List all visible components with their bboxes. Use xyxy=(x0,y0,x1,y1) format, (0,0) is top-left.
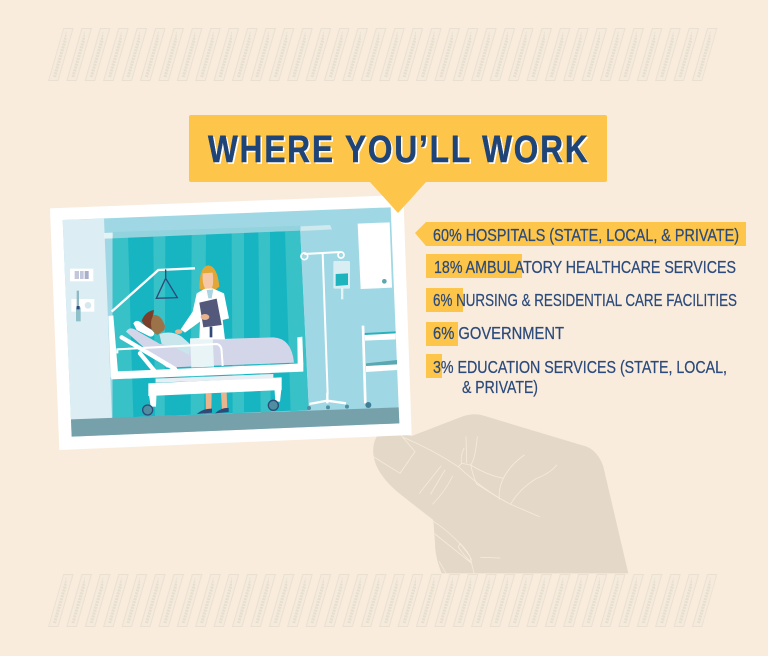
bottom stripe border xyxy=(48,574,718,627)
callout bubble xyxy=(189,115,607,213)
title callout xyxy=(189,115,607,213)
curtain xyxy=(104,225,332,418)
hospital bed xyxy=(108,268,303,415)
title: WHERE YOU’LL WORK xyxy=(208,128,590,171)
wall cabinet xyxy=(358,222,392,289)
list of workplaces xyxy=(415,222,746,397)
IV stand xyxy=(301,252,350,410)
patient head xyxy=(142,310,165,335)
row: government xyxy=(426,322,564,346)
top stripe border xyxy=(48,28,718,81)
wall xyxy=(63,207,399,437)
row: government: 6% GOVERNMENT xyxy=(433,323,564,343)
side trolley xyxy=(362,326,397,408)
left wall panel xyxy=(63,219,112,421)
photo white border xyxy=(50,195,412,450)
doctor xyxy=(175,265,229,414)
row: education xyxy=(426,354,727,397)
row: education: & PRIVATE) xyxy=(462,377,538,397)
icon: hand holding photo xyxy=(373,414,628,573)
wall socket panels xyxy=(70,269,94,321)
title shadow: WHERE YOU’LL WORK xyxy=(210,130,591,172)
floor xyxy=(71,407,399,437)
photo card xyxy=(50,195,412,450)
